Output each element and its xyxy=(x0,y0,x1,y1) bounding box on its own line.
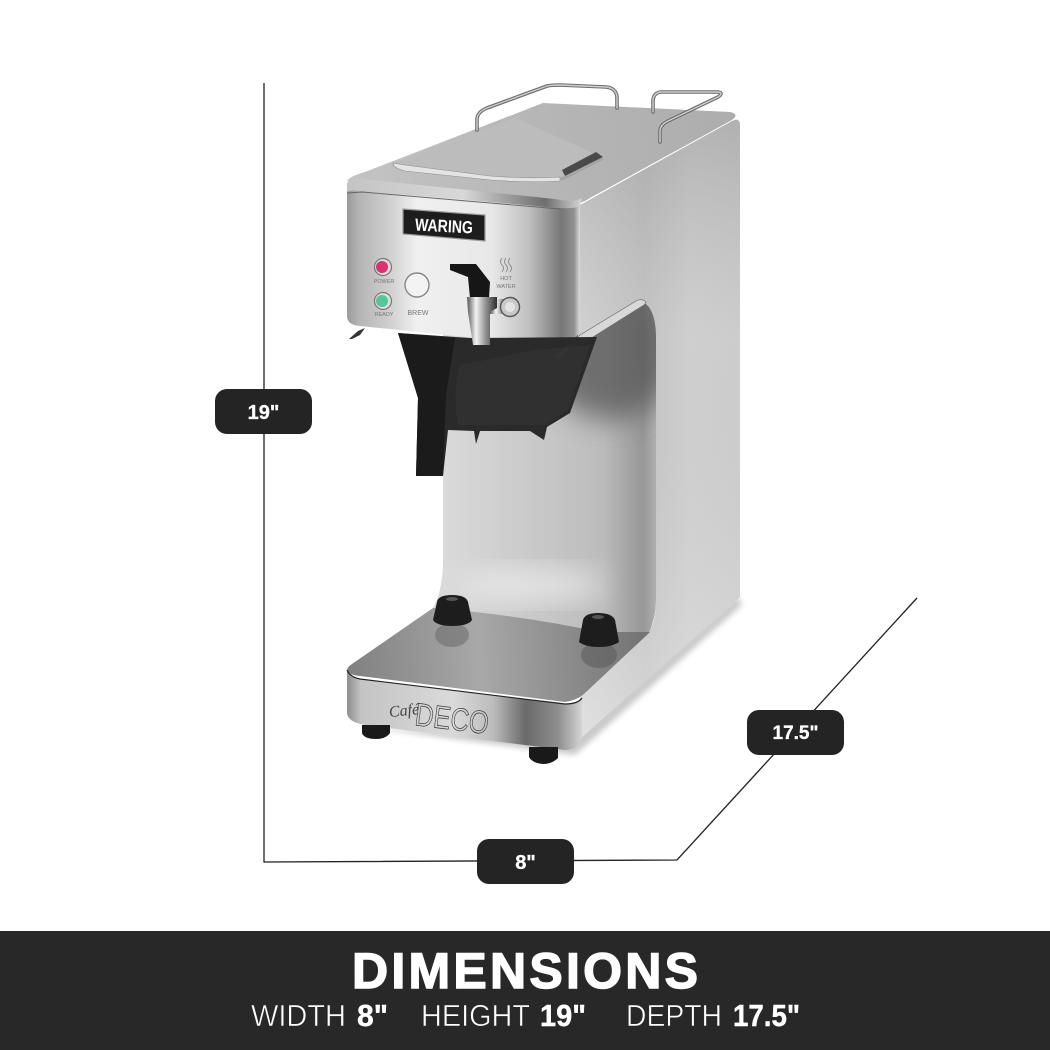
dimension lines: height, width and depth xyxy=(264,83,917,862)
width label xyxy=(477,839,574,884)
dimension summary xyxy=(251,998,800,1033)
hot water label and steam icon: WATER xyxy=(496,284,516,290)
brew button xyxy=(405,273,429,317)
head front xyxy=(347,179,582,342)
hot water label and steam icon xyxy=(496,258,516,290)
product illustration: coffee brewer xyxy=(347,85,742,764)
height label: 19" xyxy=(248,402,279,424)
back panel xyxy=(433,304,656,650)
hot water faucet xyxy=(450,264,520,345)
dimension summary: 8" xyxy=(357,998,388,1033)
carafe locators xyxy=(433,595,619,668)
side clips xyxy=(349,328,365,339)
height label xyxy=(215,389,312,434)
hot water label and steam icon: HOT xyxy=(500,276,512,282)
dimension summary: 17.5" xyxy=(733,998,800,1033)
heading: DIMENSIONS xyxy=(352,943,698,999)
depth label: 17.5" xyxy=(772,723,818,744)
brew button: BREW xyxy=(408,310,429,317)
base front xyxy=(347,670,582,750)
brand badge: WARING xyxy=(415,214,473,238)
footer band xyxy=(0,931,1050,1050)
base logo: DECO xyxy=(413,696,491,741)
dimension summary: HEIGHT xyxy=(421,998,530,1033)
brew funnel xyxy=(349,328,597,476)
power light: POWER xyxy=(374,279,394,285)
ready light xyxy=(374,292,394,318)
depth label xyxy=(747,710,844,755)
base plate xyxy=(347,608,650,702)
brand badge xyxy=(403,209,485,241)
rear handles xyxy=(477,85,721,142)
base logo xyxy=(388,696,491,741)
underside lip xyxy=(566,300,646,346)
power light xyxy=(374,258,394,285)
dimension summary: 19" xyxy=(540,998,586,1033)
ground shadow xyxy=(365,596,742,755)
width label: 8" xyxy=(515,852,536,874)
lid xyxy=(393,118,603,182)
rubber feet xyxy=(362,725,558,764)
dimension summary: WIDTH xyxy=(251,998,346,1033)
dimension summary: DEPTH xyxy=(626,998,722,1033)
side panel xyxy=(578,120,740,737)
top surface xyxy=(347,103,736,205)
base logo: Café xyxy=(388,701,421,721)
ready light: READY xyxy=(375,312,394,318)
